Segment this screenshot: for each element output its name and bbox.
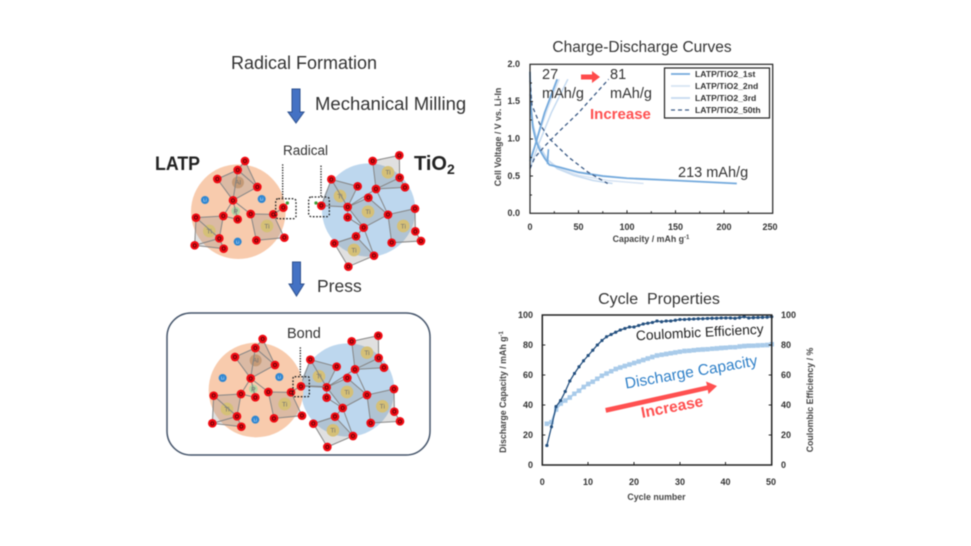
particle: TiO2: O [332,241,336,247]
left axis tick labels: 20 [523,430,533,440]
y axis tick labels [507,59,520,218]
label: radical: Radical [283,143,328,158]
x axis tick labels: 20 [629,477,639,487]
x axis tick labels: 40 [720,477,731,487]
x axis tick labels: 0 [527,222,533,232]
annotation: 27 mAh/g: 27 [542,67,558,83]
particle: LATP: O [282,236,286,242]
x axis tick labels: 50 [766,477,776,487]
particle: bonded TiO2: Ti [364,350,370,357]
right axis tick labels: 40 [781,400,791,410]
particle: bonded TiO2: O [350,339,354,345]
annotation: discharge capacity: Discharge Capacity [624,352,759,393]
particle: bonded TiO2: Ti [344,389,350,396]
x axis tick labels: 0 [540,477,545,487]
series: discharge capacity [547,344,772,424]
particle: bonded TiO2: O [376,334,380,340]
particle: LATP: O [215,177,219,183]
legend: LATP/TiO2_2nd [695,81,758,91]
label: bond: Bond [287,326,321,342]
particle: bonded TiO2: O [341,406,345,412]
right axis tick labels: 0 [781,460,786,470]
y axis tick labels: 1.0 [507,134,520,144]
chart: cycle properties [498,291,815,502]
series: coulombic efficiency [547,317,772,446]
annotation: coulombic efficiency: Coulombic Efficiency [636,322,764,343]
particle: TiO2: O [372,254,376,260]
chart: charge-discharge curves [493,39,778,244]
particle: bonded LATP: O [210,421,214,427]
particle: LATP: O [255,185,259,191]
particle: LATP [190,157,289,259]
particle: TiO2: O [346,265,350,271]
label: TiO2: TiO [414,153,447,175]
label: TiO2: 2 [447,161,455,177]
particle: bonded TiO2: O [392,410,396,416]
particle: bonded LATP: O [261,337,265,343]
right axis tick labels: 100 [781,310,796,320]
particle: TiO2: Ti [337,193,343,200]
particle: bonded LATP: Li [254,417,257,422]
y axis tick labels: 2.0 [507,59,520,69]
particle: bonded TiO2: O [377,356,381,362]
particle: TiO2: O [346,205,350,211]
y axis tick labels: 0.0 [507,208,520,218]
curve: 50th cycle [530,79,609,184]
y axis title: Cell Voltage / V vs. Li-In [493,88,503,186]
particle: bonded LATP [208,335,324,437]
annotation: 213 mAh/g: 213 mAh/g [678,165,748,181]
particle: LATP: O [236,168,240,174]
x axis tick labels [527,222,778,232]
particle: TiO2: O [419,239,423,245]
right axis tick labels: 60 [781,370,791,380]
y axis tick labels: 1.5 [507,96,520,106]
legend: LATP/TiO2_50th [695,105,761,115]
right axis tick labels [781,310,796,470]
x axis tick labels: 200 [716,222,732,232]
particle: LATP: O [271,212,275,218]
particle: LATP: Li [236,239,239,244]
particle: TiO2: O [362,226,366,232]
left axis tick labels: 100 [518,310,533,320]
particle: TiO2: Ti [351,247,357,254]
x axis title: Capacity / mAh g [613,234,684,244]
series [547,317,772,446]
particle: bonded TiO2: O [351,434,355,440]
x axis title: -1 [684,235,690,241]
particle: TiO2: O [403,185,407,191]
x axis tick labels: 50 [573,222,584,232]
annotation: 81 mAh/g: 81 [610,67,626,83]
particle: TiO2: O [413,207,417,213]
particle: TiO2: Ti [385,170,391,177]
particle: TiO2: O [356,184,360,190]
right axis tick labels: 20 [781,430,791,440]
callout: bond marker [293,347,309,397]
x axis tick labels: 10 [583,477,593,487]
particle: LATP: O [217,236,221,242]
particle: LATP: O [194,216,198,222]
plot frame with ticks [530,64,773,213]
particle: TiO2: O [354,234,358,240]
x axis tick labels: 100 [619,222,635,232]
legend: LATP/TiO2_3rd [695,93,756,103]
annotation: increase: Increase [640,393,705,422]
x axis tick labels: 150 [668,222,683,232]
particle: bonded TiO2: Ti [316,374,322,381]
particle: bonded TiO2: O [325,385,329,391]
particle: TiO2: O [390,241,394,247]
particle: LATP: Ti [207,228,212,235]
label: press: Press [317,276,362,296]
particle: LATP: O [236,217,240,223]
curve: 2nd cycle [530,79,644,184]
diagram: separated particles with radicals [155,143,455,271]
particle: bonded LATP: O [272,416,276,422]
particle: LATP: O [249,212,253,218]
particle: TiO2: Ti [365,209,371,216]
particle: LATP: O [281,206,285,212]
particle: bonded TiO2: O [311,422,315,428]
x axis tick labels: 250 [762,222,778,232]
x axis title: Cycle number [627,492,686,502]
annotation: increase: Increase [590,106,651,123]
left axis tick labels [518,310,533,470]
plot frame with ticks [542,315,772,465]
curve: 1st cycle [530,72,737,184]
left axis tick labels: 60 [523,370,533,380]
particle: TiO2: O [413,229,417,235]
particle: bonded LATP: O [253,346,257,352]
particle: TiO2: O [319,204,323,210]
particle: TiO2: O [398,176,402,182]
legend [664,68,770,118]
right axis tick labels: 80 [781,340,791,350]
left axis tick labels: 80 [523,340,533,350]
particle: bonded LATP: O [239,425,243,431]
left axis title: -1 [499,330,505,336]
particle: LATP: O [231,198,235,204]
arrow: capacity increase [581,71,600,83]
particle: LATP: O [193,243,197,249]
particle: bonded LATP: Li [278,375,281,380]
particle: TiO2 [317,151,425,271]
particle: bonded TiO2: O [353,367,357,373]
particle: bonded TiO2: O [365,393,369,399]
annotation: 27 mAh/g: mAh/g [542,86,584,102]
panel: bonded particles [167,313,430,455]
particle: LATP: Al [235,180,241,187]
particle: TiO2: O [346,215,350,221]
particle: bonded LATP: O [235,414,239,420]
particle: bonded LATP: O [300,414,304,420]
particle: bonded TiO2: O [325,445,329,451]
particle: TiO2: O [374,187,378,193]
particle: bonded LATP: P [251,386,256,393]
particle: bonded LATP: O [299,384,303,390]
particle: TiO2: O [371,159,375,165]
particle: bonded TiO2: Ti [330,428,336,435]
left axis tick labels: 40 [523,400,533,410]
label: LATP: LATP [155,153,200,175]
left axis tick labels: 0 [528,460,533,470]
particle: bonded LATP: Al [253,358,259,365]
particle: bonded LATP: O [212,394,216,400]
particle: bonded TiO2: O [335,365,339,371]
particle: bonded LATP: O [253,395,257,401]
particle: bonded TiO2: O [369,421,373,427]
particle: LATP: Li [260,197,263,202]
curve: 3rd cycle [530,79,613,184]
particle: LATP: O [254,238,258,244]
chart title: Cycle Properties [598,291,720,308]
particle: bonded LATP: O [266,390,270,396]
particle: bonded LATP: Ti [224,406,230,413]
left axis title: Discharge Capacity / mAh g [498,336,508,453]
particle: bonded LATP: O [249,376,253,382]
particle: LATP: O [221,214,225,220]
particle: LATP: O [222,247,226,253]
particle: LATP: P [233,208,238,215]
particle: LATP: Ti [264,223,270,230]
particle: TiO2: O [397,153,401,159]
right axis title: Coulombic Efficiency / % [805,348,815,452]
particle: bonded TiO2: O [333,415,337,421]
particle: bonded TiO2: O [398,419,402,425]
x axis tick labels: 30 [675,477,685,487]
arrow: milling step [288,89,304,123]
particle: TiO2: O [329,177,333,183]
curves [530,72,737,184]
legend: LATP/TiO2_1st [695,69,755,79]
chart title: Charge-Discharge Curves [552,39,732,56]
particle: bonded TiO2: Ti [380,404,385,411]
particle: bonded LATP: O [233,355,237,361]
particle: bonded TiO2: O [345,376,349,382]
particle: bonded LATP: Ti [282,401,288,408]
arrow: capacity increase [605,382,717,413]
particle: TiO2: O [386,213,390,219]
arrow: press step [289,262,304,296]
callout: radical markers [276,164,329,219]
title: radical formation: Radical Formation [231,53,377,73]
particle: bonded TiO2 [300,331,404,451]
particle: TiO2: O [366,196,370,202]
x axis tick labels [540,477,776,487]
particle: bonded LATP: Li [221,376,224,381]
particle: bonded LATP: O [239,392,243,398]
particle: bonded TiO2: O [392,387,396,393]
particle: bonded TiO2: O [382,366,386,372]
particle: bonded TiO2: O [308,358,312,364]
particle: TiO2: Ti [401,223,406,230]
particle: LATP: Li [203,198,207,203]
particle: bonded TiO2: O [325,396,329,402]
particle: bonded LATP: O [273,363,277,369]
label: mechanical milling: Mechanical Milling [315,93,466,114]
particle: LATP: O [243,159,247,165]
particle: bonded LATP: O [289,390,293,396]
annotation: 81 mAh/g: mAh/g [610,86,652,102]
y axis tick labels: 0.5 [507,171,520,181]
